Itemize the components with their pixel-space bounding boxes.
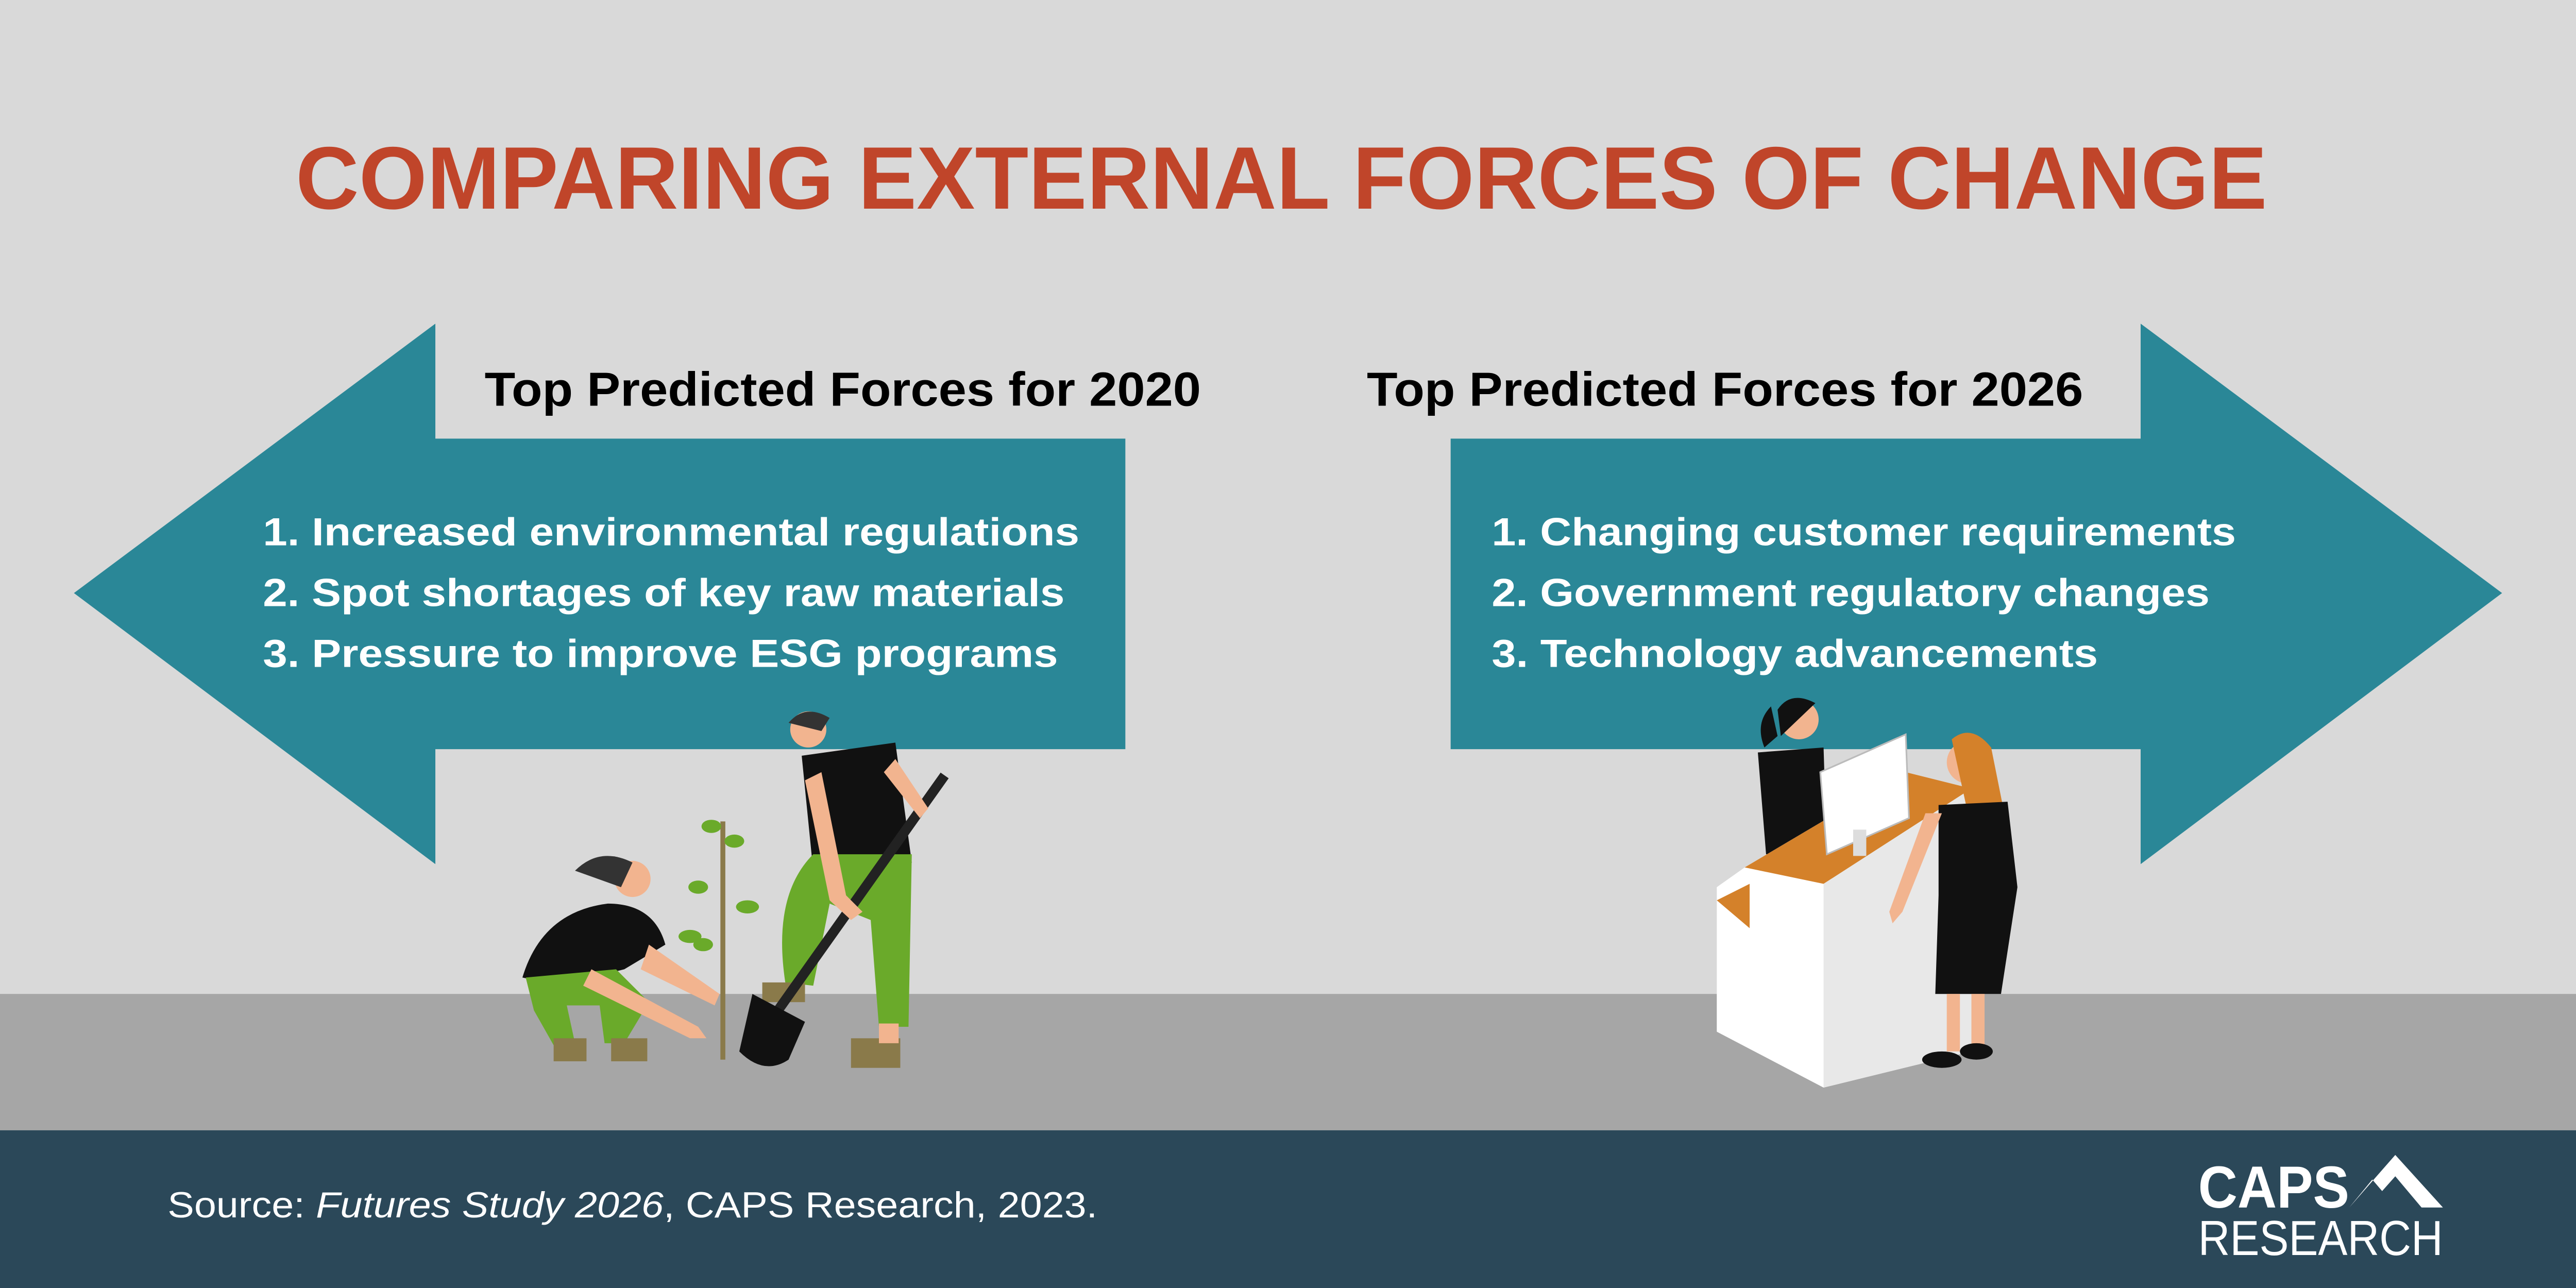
floor band	[0, 994, 2576, 1130]
list: 2026 forces: 2. Government regulatory changes	[1492, 571, 2210, 615]
list: 2026 forces: 1. Changing customer requirements	[1492, 511, 2236, 554]
list: 2020 forces: 1. Increased environmental regulations	[263, 511, 1079, 554]
illustration: planting tree	[522, 711, 945, 1068]
logo: CAPS Research	[2198, 1155, 2443, 1266]
list: 2020 forces: 2. Spot shortages of key raw materials	[263, 571, 1064, 615]
logo: CAPS Research: CAPS	[2198, 1155, 2349, 1221]
list: 2026 forces	[1492, 511, 2236, 676]
right arrow	[1451, 324, 2502, 864]
illustration: reception desk	[1717, 698, 2018, 1088]
title: COMPARING EXTERNAL FORCES OF CHANGE	[296, 129, 2267, 228]
footer band	[0, 1130, 2576, 1288]
left arrow	[74, 324, 1125, 864]
heading: 2026: Top Predicted Forces for 2026	[1367, 363, 2083, 416]
list: 2026 forces: 3. Technology advancements	[1492, 632, 2098, 676]
list: 2020 forces	[263, 511, 1079, 676]
heading: 2020: Top Predicted Forces for 2020	[485, 363, 1201, 416]
logo: CAPS Research: RESEARCH	[2198, 1211, 2443, 1266]
list: 2020 forces: 3. Pressure to improve ESG programs	[263, 632, 1058, 676]
source text: Source: Futures Study 2026 , CAPS Research, 2023.	[167, 1184, 1097, 1225]
